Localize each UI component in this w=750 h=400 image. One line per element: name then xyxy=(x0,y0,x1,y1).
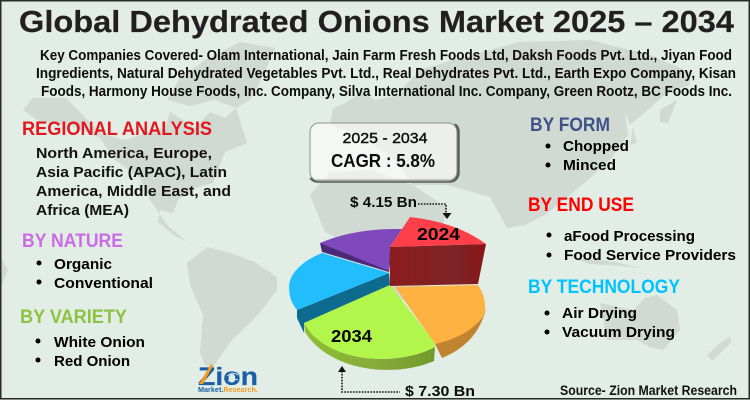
panel: by form: Minced xyxy=(563,157,616,174)
panel: by technology: Vacuum Drying xyxy=(562,324,675,341)
panel: regional analysis: REGIONAL ANALYSIS xyxy=(22,119,212,140)
panel: by variety: Red Onion xyxy=(54,353,130,370)
panel: by form: Chopped xyxy=(563,138,629,155)
panel: by variety: BY VARIETY xyxy=(20,307,127,328)
panel: by nature: Conventional xyxy=(54,275,153,292)
value callout: 2024 with arrow xyxy=(350,194,452,219)
panel: by end use: BY END USE xyxy=(528,195,634,216)
CAGR callout: CAGR : 5.8% xyxy=(331,151,435,171)
slice: orange xyxy=(395,285,486,358)
panel: by nature: Organic xyxy=(54,256,112,273)
value callout: 2024 with arrow: $ 4.15 Bn xyxy=(350,194,417,211)
CAGR callout: 2025 - 2034 xyxy=(342,130,428,147)
panel: by end use: Food Service Providers xyxy=(564,247,736,264)
title: Global Dehydrated Onions Market 2025 – 2034 xyxy=(19,4,735,39)
CAGR callout xyxy=(310,123,459,182)
slice: purple xyxy=(320,229,402,272)
panel: by nature: BY NATURE xyxy=(22,231,123,252)
panel: by form: BY FORM xyxy=(530,115,610,136)
value callout: 2034 with arrow: $ 7.30 Bn xyxy=(405,383,475,400)
logo: Zion Market Research: Market.Research. xyxy=(198,385,258,394)
panel: regional analysis xyxy=(22,119,231,219)
panel: regional analysis: America, Middle East, and xyxy=(36,183,231,200)
logo: Zion Market Research: Zion xyxy=(198,363,258,391)
panel: by end use: aFood Processing xyxy=(564,228,695,245)
slice: red xyxy=(390,217,486,286)
panel: regional analysis: North America, Europe, xyxy=(36,145,212,162)
panel: regional analysis: Asia Pacific (APAC), Latin xyxy=(36,164,227,181)
panel: regional analysis: Africa (MEA) xyxy=(36,202,129,219)
3D pie chart xyxy=(289,217,486,370)
label: 2024: 2024 xyxy=(417,224,460,244)
slice: green xyxy=(304,285,435,370)
source note: Source- Zion Market Research xyxy=(560,383,737,398)
panel: by technology: BY TECHNOLOGY xyxy=(528,277,680,298)
panel: by technology: Air Drying xyxy=(562,305,637,322)
world map background xyxy=(0,40,732,367)
value callout: 2034 with arrow xyxy=(338,366,475,400)
label: 2034: 2034 xyxy=(331,326,372,346)
panel: by end use xyxy=(528,195,736,264)
panel: by technology xyxy=(528,277,680,341)
panel: by variety xyxy=(20,307,145,370)
panel: by form xyxy=(530,115,629,174)
slice: blue xyxy=(289,253,390,333)
panel: by variety: White Onion xyxy=(54,334,145,351)
key companies text block xyxy=(36,48,736,100)
panel: by nature xyxy=(22,231,153,292)
